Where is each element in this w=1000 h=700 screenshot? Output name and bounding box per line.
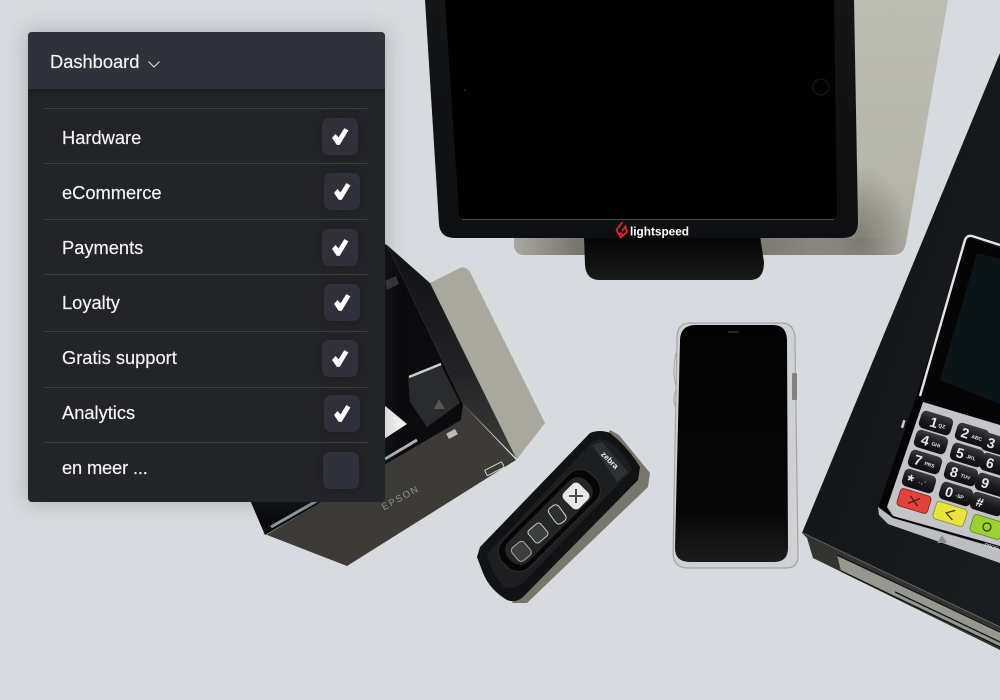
key 1: QZ: [937, 423, 946, 431]
lever highlight: [409, 364, 441, 377]
phone screen: [675, 325, 788, 562]
key 1: [918, 410, 954, 436]
scanner body: [477, 431, 640, 601]
drawer front panel: [837, 555, 1000, 647]
rim print label: PROG: [983, 542, 999, 552]
phone clear case: [673, 323, 798, 568]
scanner shadow edge: [512, 430, 650, 603]
key 6: 6: [984, 454, 996, 472]
key 9: 9: [979, 474, 991, 492]
plus glyph: [569, 489, 583, 503]
heading: Dashboard: Dashboard: [50, 51, 139, 72]
lever triangle: [434, 399, 445, 409]
logo flame: [616, 222, 627, 238]
scanner button: middle: [527, 522, 549, 544]
checkbox: en meer (empty): [323, 452, 359, 489]
row label: Hardware: Hardware: [62, 127, 141, 148]
row label: en meer: en meer ...: [62, 457, 148, 478]
key star: . , ': [918, 479, 926, 487]
key 2: ABC: [971, 434, 983, 443]
checkbox: Hardware: [322, 118, 358, 155]
key star: [900, 468, 937, 497]
icon: chevron down: [148, 61, 160, 68]
key 5: 5: [954, 444, 966, 462]
tablet body: [425, 0, 858, 238]
row label: eCommerce: eCommerce: [62, 182, 162, 203]
tablet shadow lower band: [514, 232, 902, 255]
illustration: point-of-sale hardware: [250, 0, 1000, 650]
scanner button: battery: [547, 503, 568, 526]
paper slot stripe right: [385, 440, 417, 459]
printer top face: [250, 240, 463, 535]
printer brand text: EPSON: [380, 483, 421, 513]
key star: *: [904, 471, 916, 491]
keypad plate: [887, 402, 1000, 546]
tablet camera dot: [464, 89, 466, 91]
scanner top label pad: [592, 442, 628, 482]
phone side button: [792, 373, 797, 400]
phone speaker: [728, 331, 739, 333]
receipt printer: [250, 240, 545, 566]
key 4: [913, 429, 949, 455]
drawer front lines: [837, 555, 1000, 647]
plus key: [560, 480, 592, 512]
scanner button: bottom: [510, 540, 533, 563]
handheld scanner: [477, 430, 650, 603]
lightspeed logo: [616, 222, 689, 238]
key 5: JKL: [966, 454, 976, 463]
key 7: 7: [912, 451, 924, 469]
scanner button bay: [492, 463, 607, 578]
scanner brand mark: zebra: [599, 450, 621, 471]
scanner plus button: [560, 480, 592, 512]
key 8: 8: [948, 463, 960, 481]
key hash: #: [974, 494, 986, 511]
key 0: -SP: [955, 493, 965, 501]
tablet screen: [445, 0, 837, 219]
key cancel red: [896, 488, 932, 514]
key 5: [949, 442, 985, 468]
terminal screen: [940, 253, 1000, 404]
panel: dashboard checklist: [28, 32, 385, 502]
rim triangle: [937, 535, 947, 543]
printer button: [385, 276, 399, 290]
terminal lower rim: [878, 507, 1000, 563]
panel header: [28, 32, 385, 89]
row label: Analytics: Analytics: [62, 402, 135, 423]
key 4: GHI: [930, 441, 941, 450]
logo wordmark: lightspeed: [630, 224, 689, 238]
printer small mark: [446, 429, 458, 439]
terminal black body: [878, 237, 1000, 548]
key 4: 4: [919, 431, 931, 449]
tablet stand: [584, 236, 764, 280]
key 2: 2: [959, 424, 971, 442]
USB port: [485, 462, 504, 476]
scanner inner body: [487, 440, 632, 588]
checkbox: Loyalty: [324, 284, 360, 321]
key 0: [938, 481, 974, 507]
terminal white border: [920, 236, 1000, 396]
key 3: 3: [985, 434, 997, 452]
key back yellow: [932, 501, 968, 527]
key 2: [954, 422, 990, 448]
key 1: 1: [928, 414, 940, 431]
key 0: 0: [943, 483, 955, 501]
checkbox: Payments: [322, 229, 358, 266]
scanner button strip: [500, 472, 598, 570]
cash drawer top: [802, 53, 1000, 627]
row label: Gratis support: Gratis support: [62, 347, 177, 368]
checkbox: Analytics: [324, 395, 360, 432]
key 7: PRS: [924, 461, 936, 470]
tablet home button: [813, 79, 829, 95]
screen edge highlight: [462, 218, 834, 220]
printer cover lever: [408, 363, 460, 427]
paper slot stripe left: [271, 499, 320, 527]
key 8: TUV: [960, 473, 971, 482]
checkbox: eCommerce: [324, 173, 360, 210]
cash drawer side: [802, 533, 1000, 650]
key 8: [943, 461, 979, 487]
payment terminal on cash drawer: [802, 53, 1000, 650]
key ok green: [969, 514, 1000, 540]
printer side face: [387, 245, 516, 458]
tablet POS with stand: [425, 0, 948, 280]
smartphone: [673, 323, 798, 568]
phone left buttons: [674, 353, 676, 408]
printer paper: [384, 405, 407, 439]
row label: Payments: Payments: [62, 237, 143, 258]
row label: Loyalty: Loyalty: [62, 292, 120, 313]
tablet shadow: [514, 0, 948, 255]
keypad keys: [896, 410, 1000, 540]
tablet shadow dark corner: [827, 176, 902, 255]
key 7: [907, 449, 943, 475]
printer shadow: [428, 268, 545, 459]
printer front face: [262, 404, 516, 566]
checkbox: Gratis support: [322, 340, 358, 377]
terminal side mark: [901, 420, 906, 428]
drawer top edge highlight: [803, 533, 1000, 627]
